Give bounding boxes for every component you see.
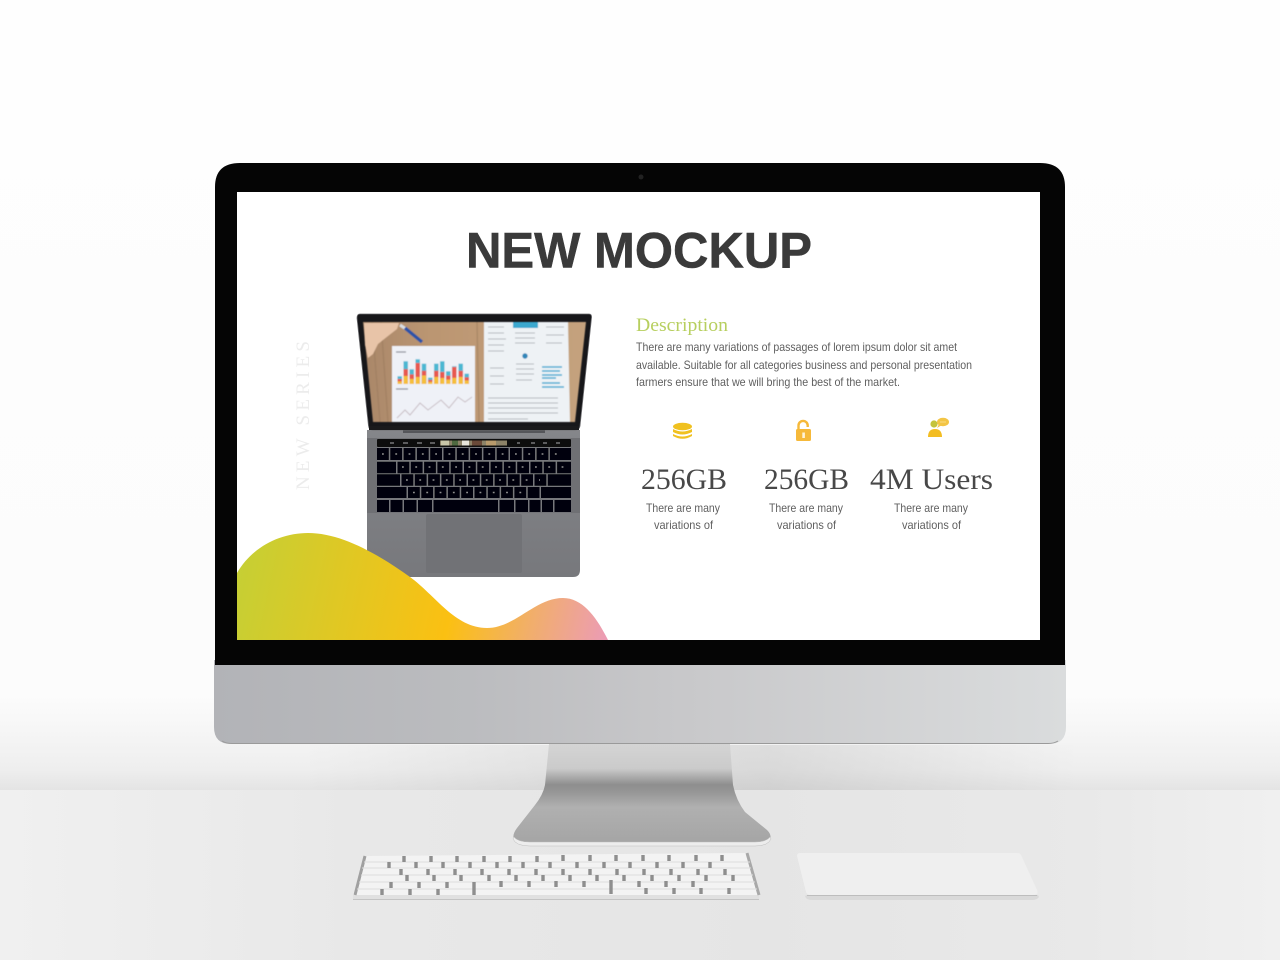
wireless keyboard bbox=[353, 853, 759, 900]
chart heading marks bbox=[396, 352, 408, 389]
webcam bbox=[638, 174, 644, 180]
paper with charts bbox=[392, 346, 475, 422]
desk surface bbox=[0, 790, 1280, 960]
stat value: 256GB bbox=[641, 463, 727, 496]
description paragraph bbox=[636, 340, 972, 389]
stat caption: variations of bbox=[654, 518, 714, 532]
icon: open lock bbox=[796, 421, 811, 441]
icon: coins bbox=[673, 423, 692, 439]
laptop lid bbox=[357, 314, 592, 430]
description paragraph: available. Suitable for all categories business and personal presentation bbox=[636, 358, 972, 372]
icon: user with speech bubble bbox=[928, 418, 949, 437]
stat value: 256GB bbox=[764, 463, 849, 496]
monitor chin bbox=[214, 660, 1066, 744]
touch bar bbox=[377, 439, 571, 447]
stat: security bbox=[764, 421, 849, 532]
description heading: Description bbox=[636, 315, 729, 336]
laptop illustration bbox=[357, 314, 592, 577]
screen hinge edge bbox=[369, 426, 579, 430]
stat caption: There are many bbox=[646, 501, 720, 515]
stat caption: There are many bbox=[894, 501, 968, 515]
gradient wave shape bbox=[237, 533, 608, 640]
keys bbox=[377, 454, 571, 506]
stat: users bbox=[870, 418, 993, 532]
key legends bbox=[382, 454, 566, 492]
red bars bbox=[398, 363, 469, 384]
vertical label: new series: NEW SERIES bbox=[293, 341, 314, 490]
stat caption: variations of bbox=[777, 518, 837, 532]
hand holding pen bbox=[364, 323, 422, 358]
hinge bbox=[403, 430, 545, 433]
stat caption bbox=[894, 501, 968, 532]
laptop base bbox=[367, 430, 580, 577]
monitor bezel bbox=[215, 163, 1065, 665]
stat caption: There are many bbox=[769, 501, 843, 515]
stat value: 4M Users bbox=[870, 463, 993, 496]
stat caption bbox=[769, 501, 843, 532]
keyboard well bbox=[367, 438, 580, 513]
description paragraph: farmers ensure that we will bring the best of the market. bbox=[636, 375, 900, 389]
trackpad bbox=[426, 514, 522, 573]
monitor stand bbox=[513, 744, 771, 846]
stat: storage bbox=[641, 423, 727, 532]
yellow bars bbox=[398, 376, 469, 384]
laptop screen photo bbox=[363, 322, 586, 422]
title: NEW MOCKUP bbox=[466, 222, 812, 278]
paper with text bbox=[484, 322, 570, 422]
trackpad accessory bbox=[797, 853, 1039, 900]
teal bars bbox=[398, 359, 469, 384]
stat caption: variations of bbox=[902, 518, 962, 532]
description paragraph: There are many variations of passages of lorem ipsum dolor sit amet bbox=[636, 340, 958, 354]
line chart bbox=[397, 397, 472, 418]
stat caption bbox=[646, 501, 720, 532]
monitor bbox=[214, 163, 1066, 744]
slide screen bbox=[237, 192, 1040, 640]
